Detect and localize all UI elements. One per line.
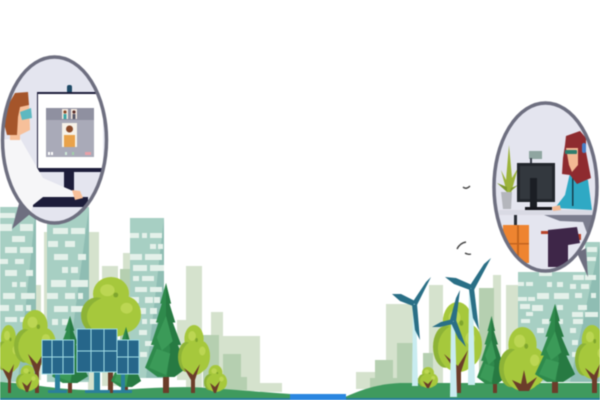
- round tree right 3: [575, 325, 600, 393]
- birds: [457, 186, 471, 254]
- bush right: [418, 367, 438, 388]
- bush left: [16, 365, 39, 392]
- tree behind turbines: [433, 302, 482, 393]
- pale skyline right: [356, 275, 518, 389]
- speech bubble left: [0, 57, 106, 229]
- tower building right: [518, 242, 600, 382]
- wind turbine 2: [445, 258, 491, 385]
- bubble tail left: [12, 200, 30, 229]
- solar panel left: [42, 340, 74, 393]
- bubble tail right: [577, 248, 588, 277]
- second small pine: [111, 327, 141, 393]
- bush left 2: [204, 365, 227, 393]
- tree: round B: [14, 310, 56, 393]
- tree: round C: [178, 325, 210, 393]
- solar panel right: [113, 340, 139, 393]
- tower building 1: [0, 207, 36, 382]
- river: [290, 394, 346, 400]
- tree: round A: [0, 325, 21, 393]
- solar panel centre: [77, 329, 117, 393]
- illustration: man at video call: [4, 84, 104, 211]
- ground strip: [0, 398, 600, 400]
- tower building 2: [47, 207, 89, 382]
- big round tree left: [81, 277, 141, 393]
- illustration: woman at desk: [497, 131, 597, 267]
- wind turbine 3: [432, 290, 466, 397]
- speech bubble right: [494, 103, 597, 277]
- pale skyline left: [36, 232, 282, 392]
- ground left: [0, 382, 290, 400]
- small pine behind panels: [52, 316, 88, 393]
- wind turbine 1: [392, 277, 431, 386]
- big pine left: [145, 283, 187, 393]
- pine right 1: [477, 316, 506, 393]
- pine right 2: [535, 304, 575, 393]
- round tree right 2: [499, 327, 546, 391]
- ground right: [345, 383, 600, 400]
- tower building 3: [130, 218, 164, 378]
